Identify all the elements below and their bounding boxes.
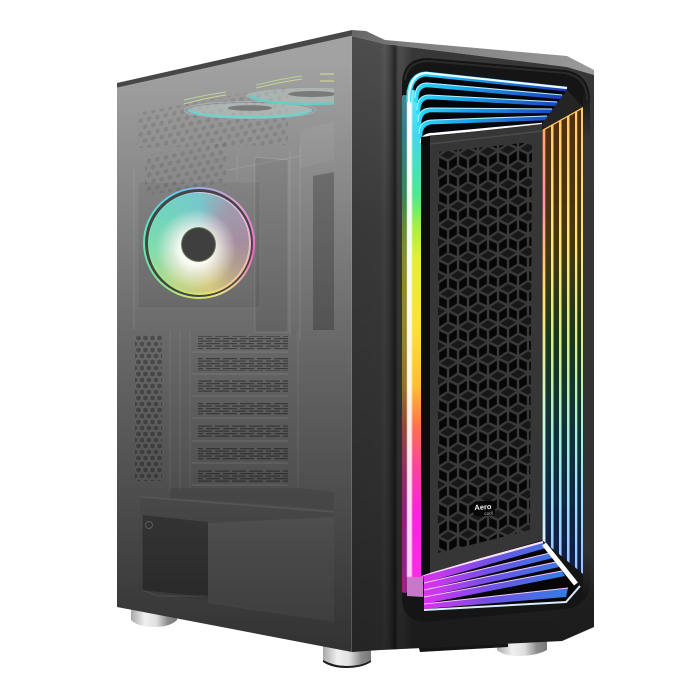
bottom plate bbox=[418, 640, 508, 652]
rear cable panel bbox=[255, 158, 288, 332]
recessed bezel bbox=[402, 58, 590, 622]
panel: right infinity mirror bbox=[542, 100, 584, 580]
panel: front mesh intake bbox=[421, 124, 542, 576]
upper mesh vents bbox=[145, 140, 226, 195]
panel: front fascia bbox=[352, 36, 594, 652]
top mesh vents bbox=[138, 85, 288, 148]
panel: left rgb light strip bbox=[402, 90, 423, 597]
icon: left rear foot bbox=[131, 600, 177, 627]
right wall of bezel bbox=[583, 90, 594, 600]
logo: cool bbox=[484, 510, 493, 516]
pc case product illustration bbox=[117, 30, 594, 668]
icon: rgb side fan bbox=[143, 187, 255, 299]
rear frame outlines bbox=[134, 146, 300, 340]
fan bracket bbox=[138, 182, 260, 308]
icon: centre foot bbox=[323, 645, 371, 668]
psu shroud bbox=[140, 497, 334, 622]
logo bbox=[472, 500, 495, 517]
honeycomb rear column bbox=[135, 335, 162, 481]
icon: front right foot bbox=[497, 638, 547, 656]
panel: tinted glass side bbox=[117, 36, 378, 652]
pink glow below strip bbox=[407, 575, 423, 597]
panel: corner bezel bbox=[542, 90, 583, 130]
lower expansion edge bbox=[170, 488, 334, 510]
logo: Aero bbox=[474, 502, 492, 512]
panel: bottom infinity mirror bbox=[423, 542, 580, 610]
expansion slots bbox=[170, 332, 298, 490]
psu cutout bbox=[142, 515, 208, 597]
panel: top infinity mirror bbox=[409, 73, 567, 143]
panel: top edge of case bbox=[117, 30, 594, 88]
cube mesh grille bbox=[438, 142, 532, 553]
top fans bbox=[184, 73, 334, 119]
